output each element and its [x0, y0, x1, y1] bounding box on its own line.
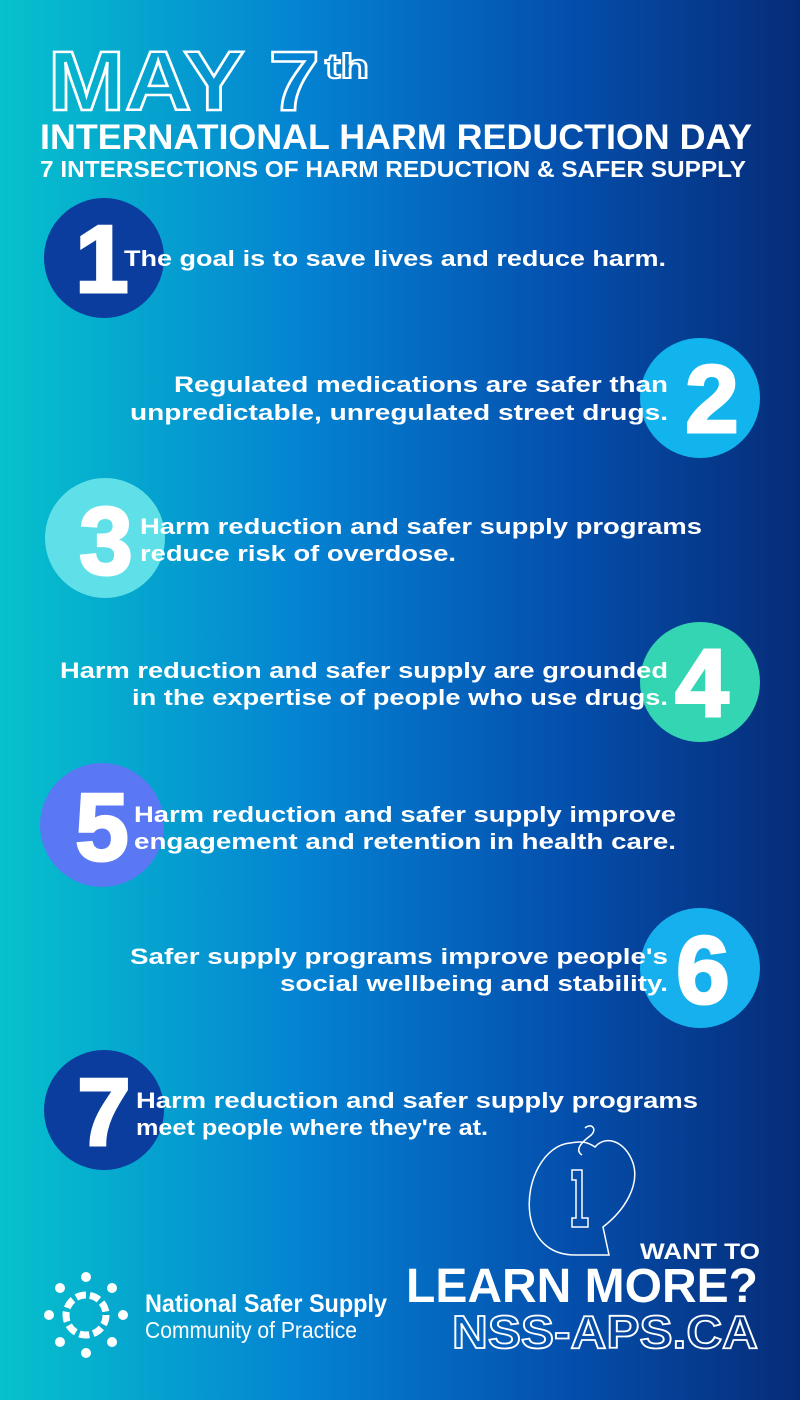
item 3: [45, 478, 702, 598]
item 6: 6: [676, 917, 730, 1024]
item 1: [44, 198, 666, 318]
item 6: Safer supply programs improve people's: [130, 944, 668, 969]
item 4: 4: [675, 630, 729, 737]
item 6: social wellbeing and stability.: [280, 971, 668, 996]
item 1: 1: [75, 206, 129, 313]
item 4: [60, 622, 760, 742]
item 5: 5: [75, 774, 129, 881]
item 5: engagement and retention in health care.: [134, 829, 676, 854]
call to action: [406, 1239, 760, 1358]
item 3: Harm reduction and safer supply programs: [140, 514, 702, 539]
item 5: [40, 763, 676, 887]
item 7: [44, 1050, 698, 1170]
item 1: The goal is to save lives and reduce harm.: [124, 246, 666, 271]
logo: [44, 1272, 387, 1358]
item 3: 3: [79, 488, 133, 595]
icon: info speech bubble: [529, 1126, 635, 1255]
heading: INTERNATIONAL HARM REDUCTION DAY: [40, 118, 752, 157]
item 2: Regulated medications are safer than: [174, 372, 668, 397]
logo: Community of Practice: [145, 1317, 357, 1343]
title: th: [325, 48, 369, 86]
item 7: Harm reduction and safer supply programs: [136, 1088, 698, 1113]
item 3: reduce risk of overdose.: [140, 541, 456, 566]
item 2: [130, 338, 760, 458]
item 4: in the expertise of people who use drugs.: [132, 685, 668, 710]
item 2: 2: [685, 346, 739, 453]
call to action: NSS-APS.CA: [452, 1306, 758, 1358]
item 6: [130, 908, 760, 1028]
item 5: Harm reduction and safer supply improve: [134, 802, 676, 827]
item 7: meet people where they're at.: [136, 1115, 488, 1140]
call to action: WANT TO: [640, 1239, 760, 1264]
item 7: 7: [77, 1059, 131, 1166]
logo: National Safer Supply: [145, 1290, 387, 1318]
item 4: Harm reduction and safer supply are grounded: [60, 658, 668, 683]
subheading: 7 INTERSECTIONS OF HARM REDUCTION & SAFER SUPPLY: [40, 156, 746, 182]
item 2: unpredictable, unregulated street drugs.: [130, 400, 668, 425]
title: MAY 7: [48, 34, 320, 128]
call to action: LEARN MORE?: [406, 1260, 758, 1313]
